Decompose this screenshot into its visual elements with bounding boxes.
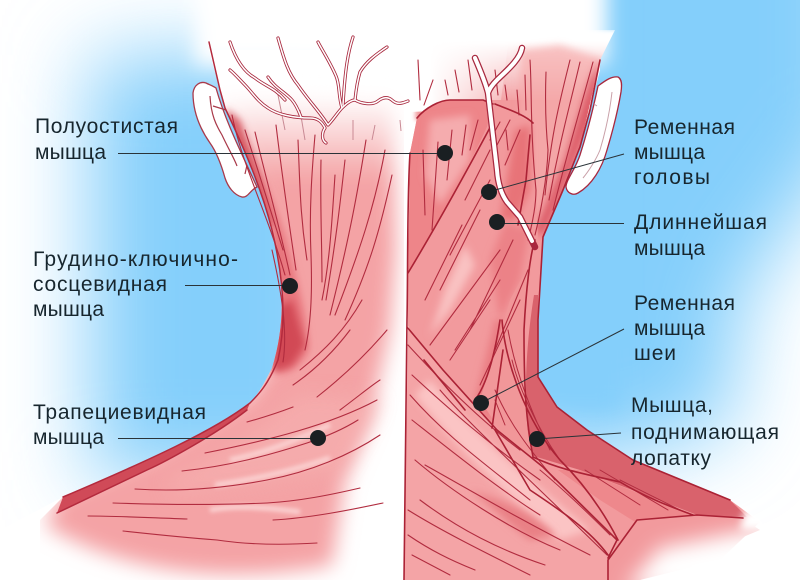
label: trapezius: мышца — [33, 426, 104, 449]
label: levator scapulae: поднимающая — [631, 421, 779, 444]
fibers: lower right neck and levator scapulae — [495, 330, 680, 535]
faint lines in pale upper area — [277, 90, 401, 140]
label: longissimus: Длиннейшая — [634, 211, 767, 234]
left half: sternocleidomastoid and trapezius muscles — [45, 42, 401, 574]
muscle borders: right side — [404, 60, 743, 580]
label: semispinalis: Полуостистая — [35, 115, 178, 138]
fibers: right trapezius — [408, 345, 607, 575]
anatomical marker dots — [282, 145, 545, 447]
label: levator scapulae: лопатку — [631, 447, 712, 470]
nerve on right — [475, 48, 535, 247]
outline: left neck and shoulder — [57, 42, 283, 513]
label: splenius capitis: Ременная — [634, 116, 735, 139]
label: trapezius: Трапециевидная — [33, 401, 206, 424]
label: longissimus: мышца — [634, 237, 705, 260]
nerve tree — [230, 37, 408, 143]
fibers: left trapezius — [88, 300, 387, 544]
left ear — [193, 82, 257, 197]
semispinalis muscle — [408, 100, 493, 273]
shoulder — [609, 517, 760, 574]
right half: back of neck muscles — [404, 30, 800, 580]
splenius capitis muscle — [408, 118, 538, 328]
label: levator scapulae: Мышца, — [631, 394, 713, 417]
label: sternocleidomastoid: сосцевидная — [33, 273, 167, 296]
fibers: upper right neck — [418, 60, 593, 385]
label: splenius capitis: головы — [634, 166, 710, 189]
fibers: left neck — [232, 115, 392, 362]
label: splenius cervicis: мышца — [634, 317, 705, 340]
muscle base right — [404, 30, 760, 580]
label: splenius cervicis: шеи — [634, 342, 676, 365]
muscle base left — [45, 94, 396, 574]
label: splenius capitis: мышца — [634, 141, 705, 164]
levator scapulae band — [526, 295, 747, 517]
label: sternocleidomastoid: Грудино-ключично- — [33, 248, 238, 271]
leader lines — [118, 154, 624, 439]
right ear — [566, 77, 622, 194]
label: sternocleidomastoid: мышца — [33, 298, 104, 321]
label: semispinalis: мышца — [35, 141, 106, 164]
label: splenius cervicis: Ременная — [634, 292, 735, 315]
trapezius right — [404, 327, 617, 580]
